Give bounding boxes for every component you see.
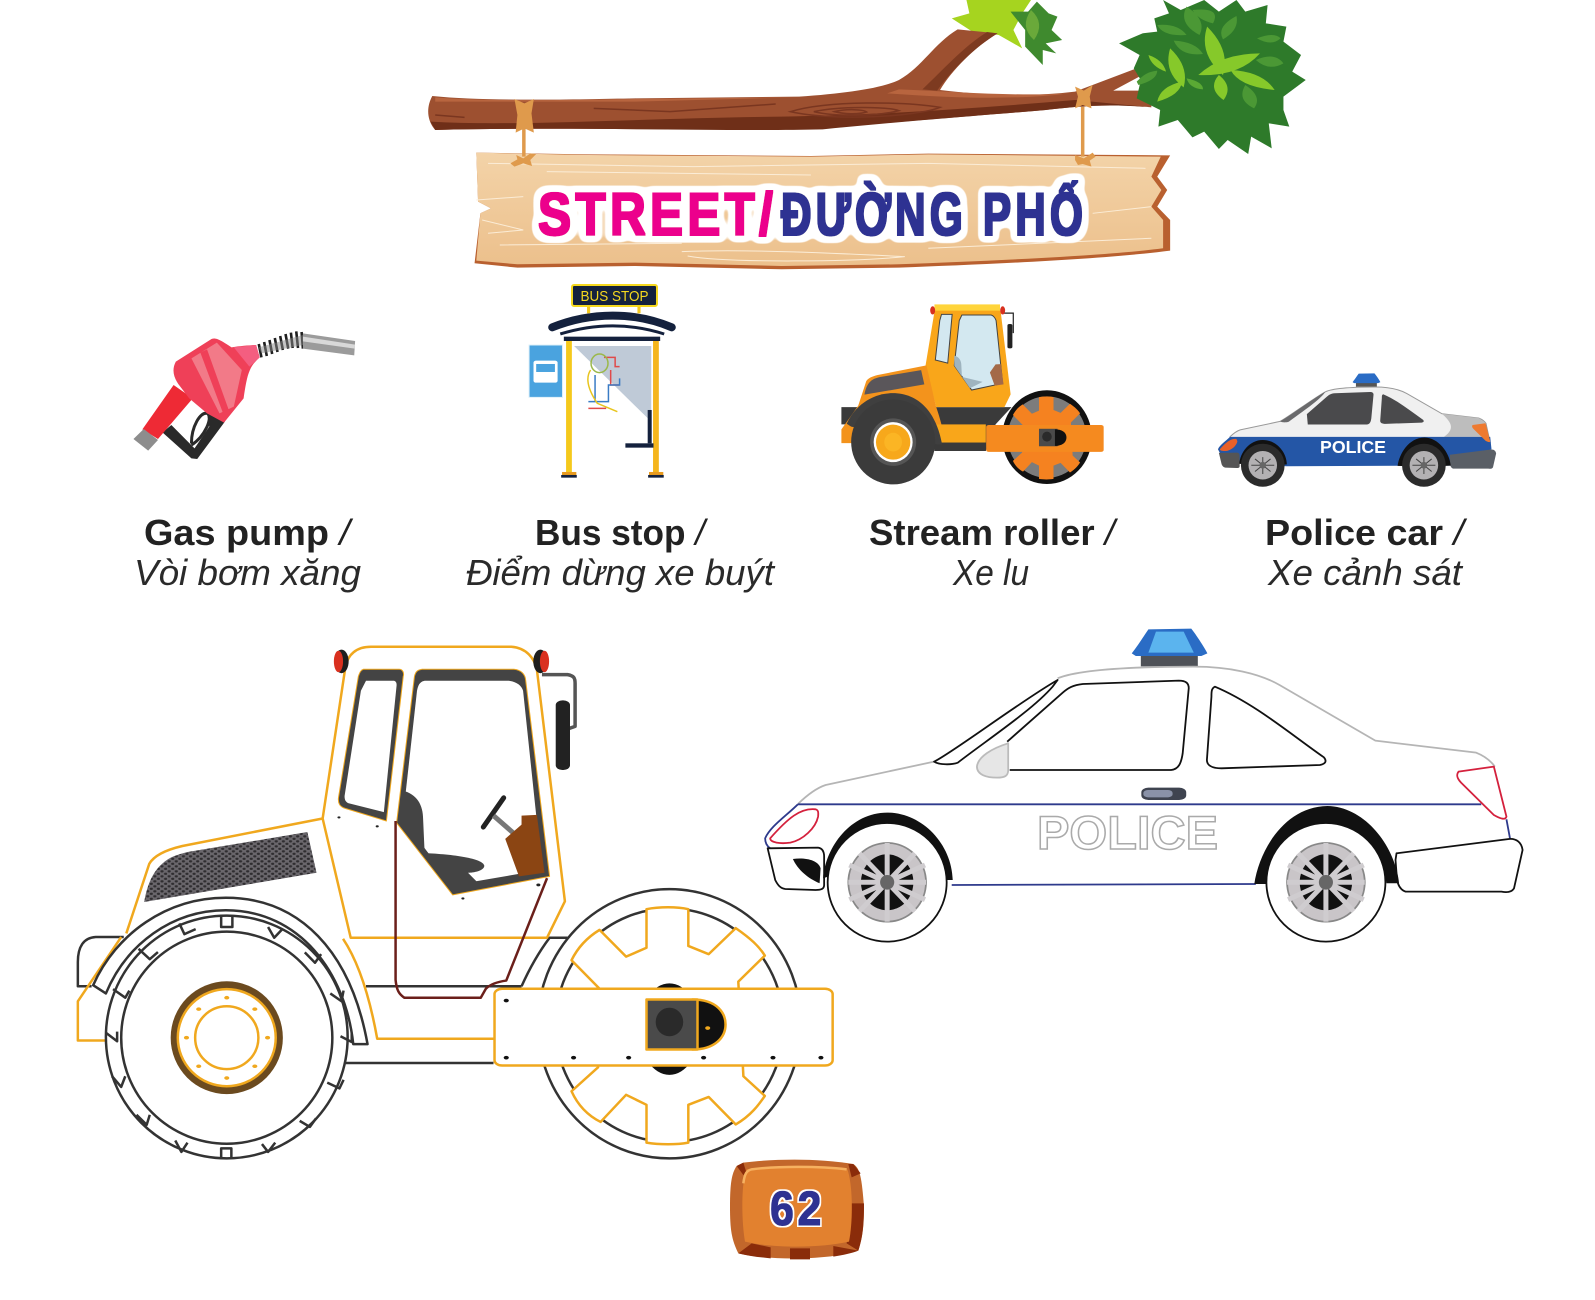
rear window xyxy=(1207,687,1326,768)
nozzle spout metal xyxy=(303,333,355,355)
cab and hood outline xyxy=(323,647,565,938)
blue stripes xyxy=(765,804,1510,885)
icon: police car xyxy=(1218,373,1496,487)
bench xyxy=(648,410,652,443)
headlight xyxy=(770,809,818,843)
fender xyxy=(93,898,368,1044)
page number: 62 xyxy=(770,1183,825,1236)
hanging wooden sign xyxy=(475,85,1170,269)
door handle xyxy=(1141,788,1186,800)
english name: Stream roller / xyxy=(869,512,1119,553)
vietnamese name: Vòi bơm xăng xyxy=(134,552,361,593)
badge frame xyxy=(730,1160,864,1259)
title xyxy=(538,181,1087,248)
big leaf cluster xyxy=(1119,0,1306,154)
bus stop sign xyxy=(572,285,657,306)
vietnamese name: Điểm dừng xe buýt xyxy=(466,552,776,593)
lower blue body xyxy=(1218,437,1491,466)
left rope xyxy=(510,99,536,167)
door window xyxy=(397,669,550,895)
front window xyxy=(1007,681,1189,770)
label: gas pump xyxy=(134,512,361,593)
police car door text: POLICE xyxy=(1320,437,1386,457)
rear hub xyxy=(171,981,283,1094)
page number badge xyxy=(730,1160,864,1259)
tip xyxy=(133,429,158,451)
mirror xyxy=(1007,324,1012,348)
handle xyxy=(142,385,193,439)
rear bumper xyxy=(1396,839,1523,892)
icon: bus stop xyxy=(529,285,672,478)
wheel arches xyxy=(823,806,1399,884)
frame stripes xyxy=(737,1163,864,1259)
front wheel xyxy=(828,823,947,942)
rear tyre xyxy=(106,916,352,1158)
label: bus stop xyxy=(466,512,776,593)
icon: road roller xyxy=(841,304,1104,484)
side mirror xyxy=(977,743,1008,778)
vietnamese name: Xe lu xyxy=(952,552,1029,593)
posts xyxy=(566,341,572,473)
english name: Police car / xyxy=(1265,512,1468,553)
lights and bumpers xyxy=(1220,439,1237,451)
badge face xyxy=(742,1166,852,1247)
coloring outline: road roller xyxy=(78,647,833,1158)
windows xyxy=(1307,392,1374,424)
door outline xyxy=(396,821,547,998)
shelter panel xyxy=(574,346,651,422)
cab dots xyxy=(337,816,540,900)
roof xyxy=(552,316,672,327)
coloring outline: police car xyxy=(765,629,1523,942)
label: police car xyxy=(1265,512,1468,593)
seat xyxy=(399,791,484,888)
pump body xyxy=(173,338,260,423)
dark frame lines xyxy=(78,937,567,1063)
sign board xyxy=(475,153,1170,269)
hose xyxy=(259,331,303,357)
steering wheel xyxy=(483,798,504,827)
english name: Gas pump / xyxy=(144,512,354,553)
upper body xyxy=(1230,387,1490,443)
grille xyxy=(144,832,317,902)
small leaf cluster xyxy=(952,0,1062,65)
front drum xyxy=(538,889,801,1158)
taillight xyxy=(1457,767,1506,819)
branch wood xyxy=(428,29,1151,130)
rear wheel xyxy=(1266,823,1385,942)
wood grain xyxy=(476,163,1151,261)
side mirror xyxy=(542,675,575,770)
bus stop sign text: BUS STOP xyxy=(580,288,648,305)
beacon xyxy=(1356,383,1377,387)
police outline text: POLICE xyxy=(1037,806,1218,859)
blue timetable with bus xyxy=(529,345,563,397)
windshield xyxy=(934,680,1058,764)
title: English: STREET/ xyxy=(538,181,777,248)
front bumper xyxy=(768,848,824,890)
title: Vietnamese: ĐƯỜNG PHỐ xyxy=(781,181,1087,248)
beacon xyxy=(1132,629,1207,666)
roller beam xyxy=(986,425,1104,452)
drum xyxy=(1002,390,1092,484)
side window xyxy=(338,669,404,821)
roller beam xyxy=(495,989,833,1066)
grille xyxy=(864,370,924,395)
label: stream roller xyxy=(869,512,1119,593)
windows xyxy=(935,314,1003,390)
wheels xyxy=(1239,438,1451,467)
right rope xyxy=(1075,85,1096,167)
console xyxy=(505,815,544,876)
trigger guard xyxy=(162,413,225,459)
icon: gas pump xyxy=(133,331,355,459)
body xyxy=(841,407,1012,451)
body top outline xyxy=(798,667,1495,804)
rear wheel xyxy=(847,393,942,444)
beacon lights xyxy=(334,650,549,673)
route map xyxy=(588,357,620,408)
vietnamese name: Xe cảnh sát xyxy=(1267,552,1464,593)
english name: Bus stop / xyxy=(535,512,709,553)
tree branch with leaves xyxy=(428,0,1306,154)
